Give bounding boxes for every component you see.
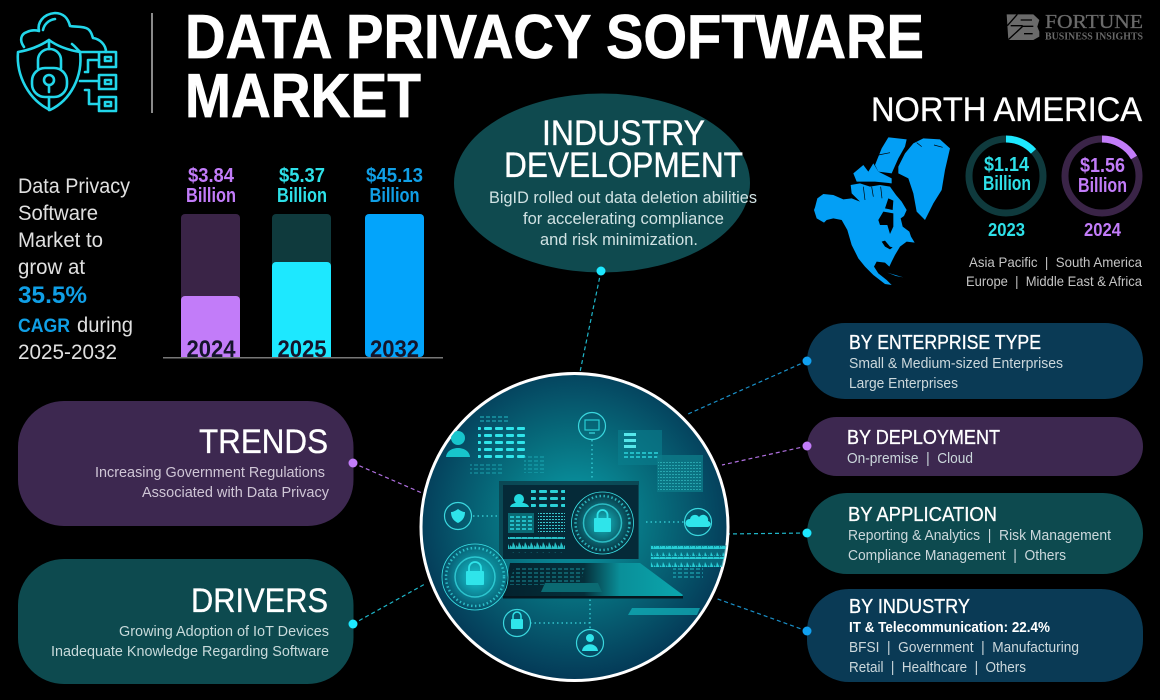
bar 2025: $5.37	[279, 165, 325, 187]
panel: by industry: BY INDUSTRY	[849, 596, 970, 618]
title: MARKET	[185, 62, 421, 131]
panel: drivers: DRIVERS	[191, 582, 328, 620]
text: CAGR statement: Software	[18, 202, 98, 225]
panel: industry development: INDUSTRY	[542, 114, 705, 153]
connector: industry	[715, 598, 812, 636]
ring: 2024 value: 2024	[1084, 220, 1121, 240]
text: other regions	[966, 254, 1142, 289]
security ring screen	[570, 491, 634, 555]
divider	[151, 13, 153, 113]
ring: 2024 value: $1.56	[1080, 155, 1125, 177]
text: other regions: Europe | Middle East & Africa	[966, 273, 1142, 289]
ring: 2023 value: $1.14	[984, 154, 1030, 176]
logo: Fortune Business Insights	[1007, 11, 1143, 42]
ring: 2024 value	[1065, 139, 1139, 240]
title: DATA PRIVACY SOFTWARE	[185, 3, 924, 72]
icon: cloud	[685, 515, 711, 527]
bar 2032: 2032	[370, 336, 419, 363]
text: CAGR statement: CAGR	[18, 315, 70, 337]
panel: trends: Increasing Government Regulations	[95, 464, 325, 481]
text: CAGR statement: 35.5%	[18, 282, 87, 309]
panel: by industry: BFSI | Government | Manufacturing	[849, 639, 1079, 656]
ring: 2024 value: Billion	[1078, 175, 1127, 197]
icon: shield	[451, 509, 465, 523]
bar chart: market size	[163, 165, 443, 363]
panel: trends: Associated with Data Privacy	[142, 484, 329, 501]
data panel top right	[618, 430, 703, 492]
text: CAGR statement: Data Privacy	[18, 175, 130, 198]
heading: North America: NORTH AMERICA	[871, 91, 1142, 129]
bar 2025	[272, 165, 331, 363]
icon row with dotted links	[444, 412, 712, 656]
panel: industry development	[454, 94, 757, 272]
bar 2024: $3.84	[188, 165, 235, 187]
logo: Fortune Business Insights: BUSINESS INSIGHTS	[1045, 32, 1143, 42]
connector: application	[725, 528, 812, 538]
bar 2024: Billion	[186, 185, 236, 207]
panel: trends: TRENDS	[199, 423, 328, 461]
connector: industry development	[580, 266, 606, 372]
panel: by deployment	[807, 417, 1143, 476]
panel: industry development: and risk minimization.	[540, 230, 698, 249]
panel: by enterprise type: BY ENTERPRISE TYPE	[849, 332, 1041, 354]
panel: industry development: DEVELOPMENT	[504, 146, 743, 185]
panel: by application: Compliance Management | Others	[848, 547, 1066, 564]
icon: user	[582, 634, 598, 651]
panel: industry development: for accelerating compliance	[523, 209, 724, 228]
panel: by deployment: BY DEPLOYMENT	[847, 427, 1000, 449]
icon: shield, cloud and lock	[18, 13, 116, 111]
connector: enterprise	[688, 356, 812, 414]
connector: drivers	[348, 584, 425, 628]
connector: trends	[348, 458, 422, 493]
bar 2024: 2024	[186, 336, 236, 363]
illustration: laptop security circle	[421, 374, 728, 680]
text: CAGR statement: Market to	[18, 229, 103, 252]
bar 2025: Billion	[277, 185, 327, 207]
laptop	[499, 481, 683, 598]
panel: drivers: Growing Adoption of IoT Devices	[119, 623, 329, 640]
text: CAGR statement: 2025-2032	[18, 341, 117, 364]
bar 2032: $45.13	[366, 165, 423, 187]
map: North America	[814, 137, 950, 285]
bar 2024	[181, 165, 240, 363]
title	[185, 3, 924, 131]
panel: drivers: Inadequate Knowledge Regarding Software	[51, 643, 329, 660]
text: other regions: Asia Pacific | South America	[969, 254, 1142, 270]
panel: by industry: Retail | Healthcare | Others	[849, 659, 1026, 676]
panel: trends	[18, 401, 354, 526]
panel: by application	[807, 493, 1143, 574]
connector: deployment	[722, 442, 812, 465]
panel: industry development: BigID rolled out data deletion abilities	[489, 188, 757, 207]
icon: padlock	[511, 612, 523, 629]
panel: by industry	[807, 589, 1143, 682]
panel: by application: Reporting & Analytics | Risk Management	[848, 527, 1112, 544]
panel: by industry: IT & Telecommunication: 22.4%	[849, 619, 1050, 636]
text: CAGR statement: grow at	[18, 256, 85, 279]
data panel top left	[446, 416, 544, 474]
panel: by enterprise type: Large Enterprises	[849, 375, 958, 392]
bar 2025: 2025	[278, 336, 326, 363]
security ring lower left	[441, 543, 509, 611]
logo: Fortune Business Insights: FORTUNE	[1045, 11, 1143, 33]
ring: 2023 value: 2023	[988, 220, 1025, 240]
ring: 2023 value: Billion	[983, 173, 1031, 195]
panel: drivers	[18, 559, 354, 684]
bar 2032: Billion	[370, 185, 420, 207]
data panel right charts	[628, 545, 728, 615]
panel: by application: BY APPLICATION	[848, 504, 997, 526]
ring: 2023 value	[969, 139, 1043, 240]
text: CAGR statement	[18, 175, 133, 364]
bar 2032	[365, 165, 424, 363]
panel: by deployment: On-premise | Cloud	[847, 450, 973, 467]
panel: by enterprise type: Small & Medium-sized Enterprises	[849, 355, 1063, 372]
panel: by enterprise type	[807, 323, 1143, 399]
text: CAGR statement: during	[77, 314, 133, 337]
